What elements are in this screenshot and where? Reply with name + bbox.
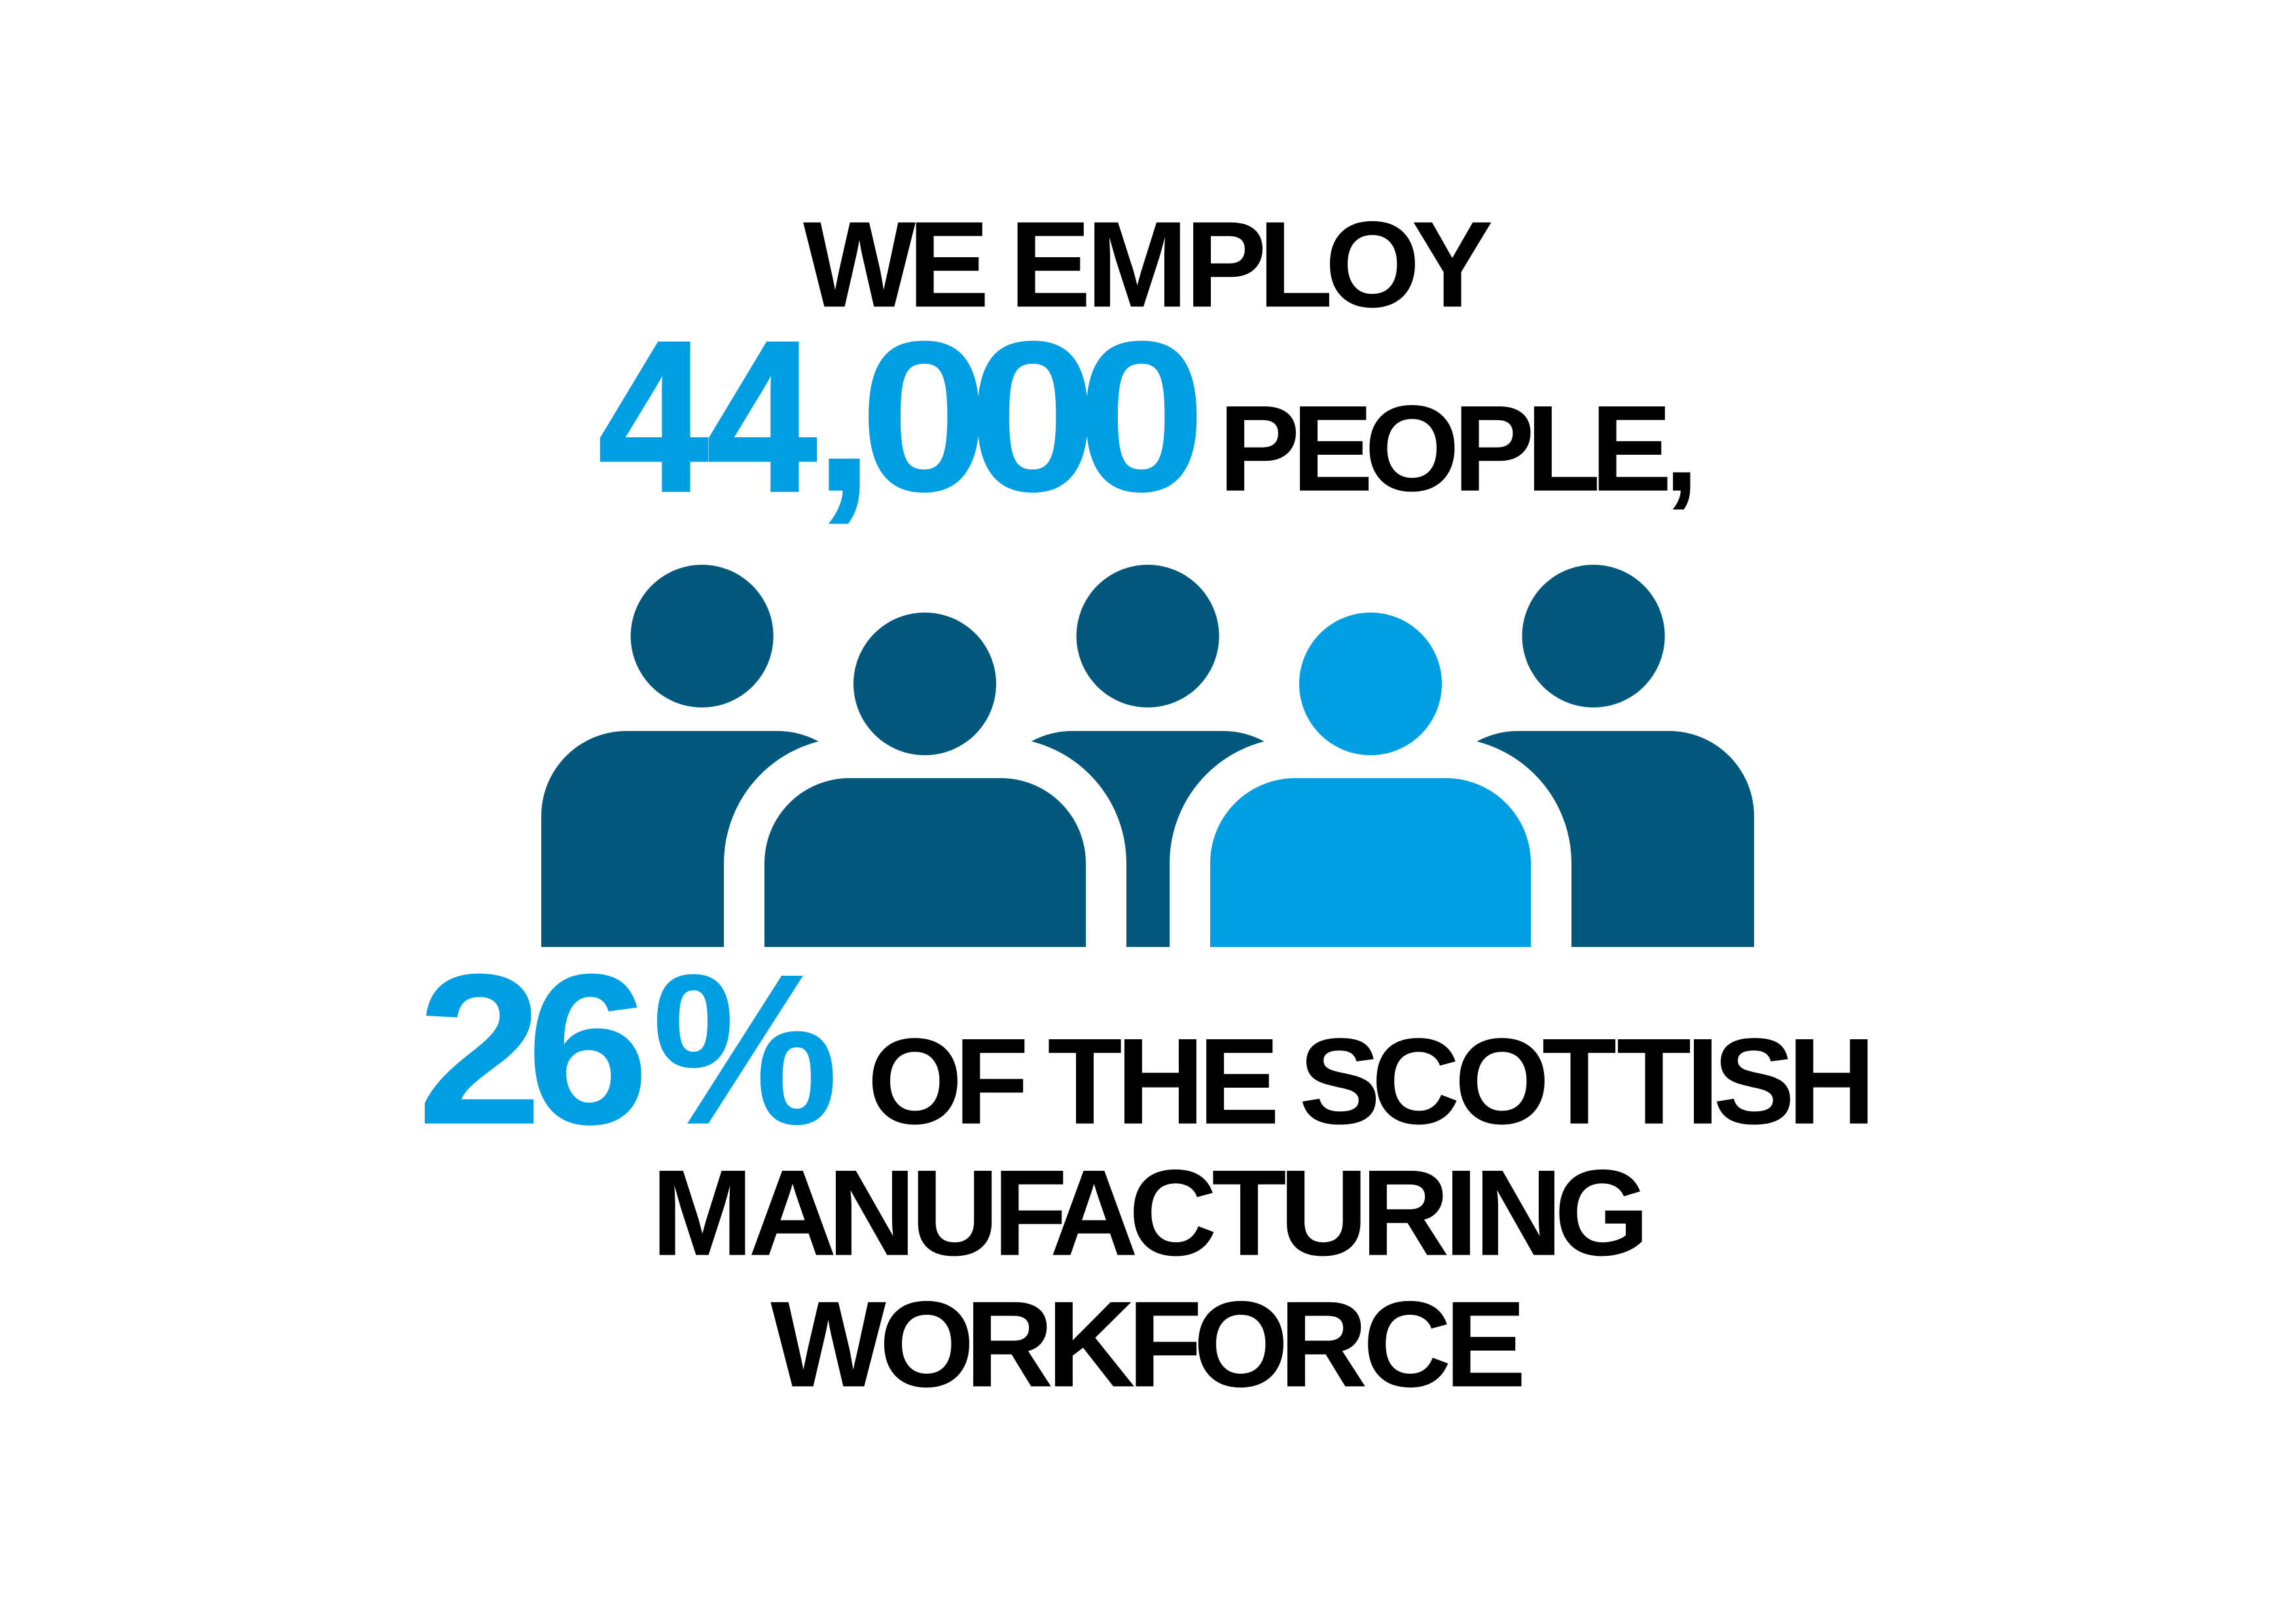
number: 44,000: 4	[598, 296, 709, 537]
heading: we employ: W	[803, 196, 916, 332]
person 1	[541, 565, 863, 947]
text: people: PEOPLE,	[1219, 380, 1698, 517]
statistic line: 44,000 people	[598, 296, 1698, 537]
person 5	[1433, 565, 1754, 947]
number: 44,000: 0	[859, 296, 989, 537]
text: of the Scottish: OF	[867, 1013, 1029, 1150]
number: 26%	[417, 929, 838, 1169]
text: of the Scottish	[867, 1013, 1876, 1150]
number: 26%: 2	[417, 929, 543, 1169]
number: 44,000: ,	[814, 296, 874, 537]
statistic line: 26% of the Scottish	[417, 929, 1876, 1169]
number: 44,000: 4	[707, 296, 818, 537]
icon: group of five people	[511, 565, 1787, 982]
mask below baseline	[511, 947, 1787, 967]
person 3	[987, 565, 1308, 947]
text: of the Scottish: THE	[1047, 1013, 1280, 1150]
person 4 highlighted	[1210, 613, 1531, 982]
text: of the Scottish: SCOTTISH	[1299, 1013, 1876, 1150]
text: manufacturing: MANUFACTURING	[651, 1145, 1649, 1281]
number: 44,000: 0	[1077, 296, 1206, 537]
number: 26%: 6	[526, 929, 649, 1169]
person 2	[764, 613, 1086, 982]
text: workforce: WORKFORCE	[770, 1275, 1526, 1412]
heading: we employ: EMPLOY	[1009, 196, 1493, 332]
number: 44,000: 0	[968, 296, 1098, 537]
heading: we employ: E	[908, 196, 990, 332]
number: 26%: %	[652, 929, 838, 1169]
number: 44,000	[598, 296, 1206, 537]
